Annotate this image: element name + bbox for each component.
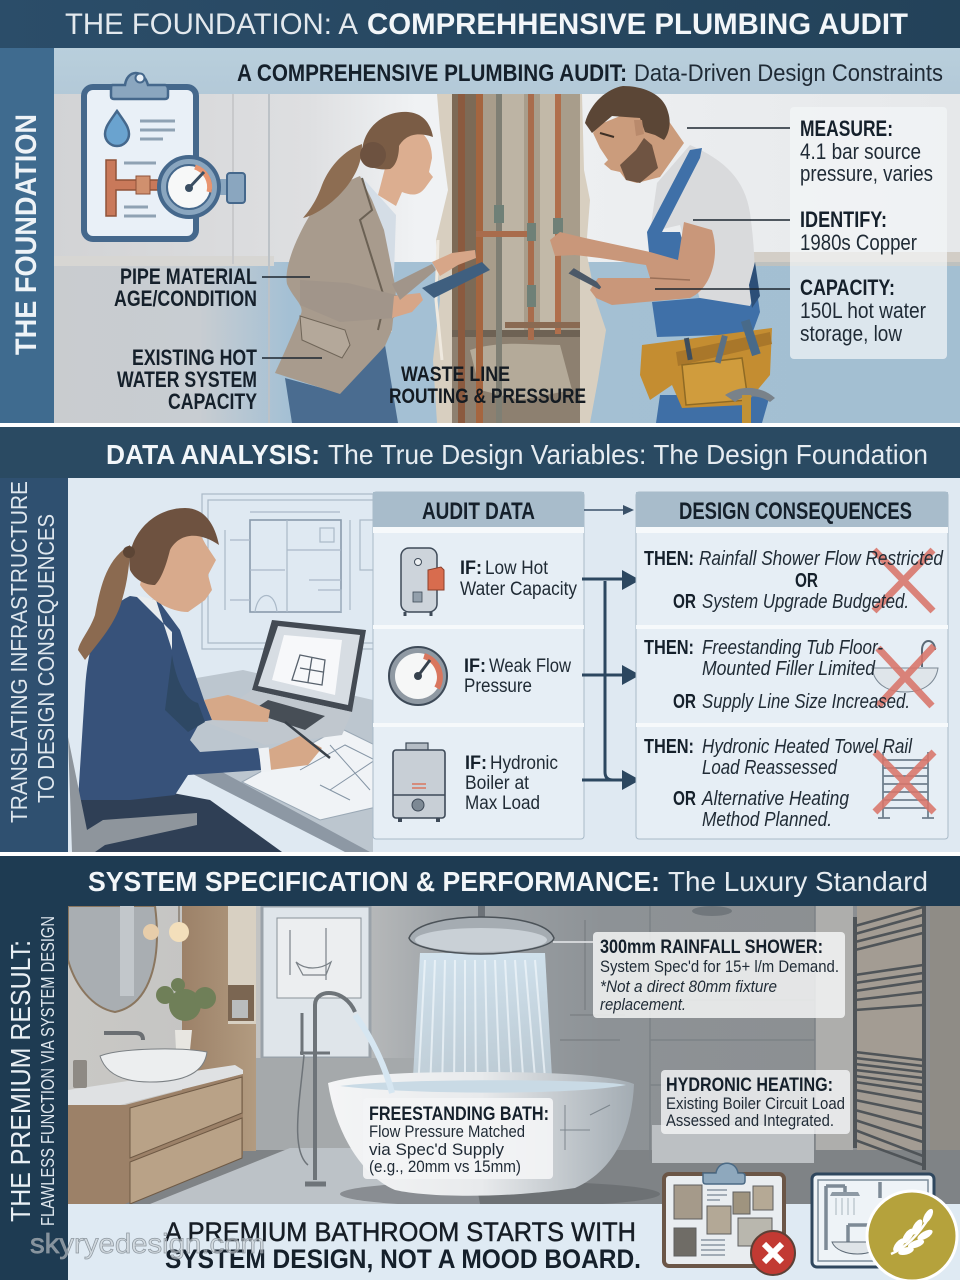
callout labels: pipe material and hot water: CAPACITY xyxy=(168,389,257,414)
callout labels: pipe material and hot water: EXISTING HOT xyxy=(132,345,257,370)
icon: system schematic xyxy=(812,1174,934,1267)
audit data table: Pressure xyxy=(464,676,532,697)
audit data table: Water Capacity xyxy=(460,579,577,600)
design consequences table: OR xyxy=(673,788,696,810)
audit data table xyxy=(373,492,584,839)
design consequences table: THEN: xyxy=(644,736,694,758)
side label: translating infrastructure xyxy=(0,478,68,852)
arrows: audit data to consequences xyxy=(582,505,640,790)
logo badge: wheat sprig xyxy=(867,1191,957,1280)
panel: the foundation xyxy=(0,48,960,423)
measurements callout box: storage, low xyxy=(800,321,902,346)
callout: hydronic heating: Assessed and Integrated. xyxy=(666,1111,834,1130)
section heading: system specification: SYSTEM SPECIFICATION & PERFORMANCE: xyxy=(88,866,660,897)
audit data table: IF: xyxy=(464,656,486,677)
design consequences table: Load Reassessed xyxy=(702,757,838,779)
audit scene illustration xyxy=(54,86,960,423)
wall tap xyxy=(104,1033,143,1040)
blueprint on wall xyxy=(202,494,382,649)
measurements callout box: MEASURE: xyxy=(800,116,893,141)
measurements callout box: pressure, varies xyxy=(800,161,933,186)
plumber xyxy=(550,86,775,423)
mirror xyxy=(68,906,157,1012)
design consequences table: Mounted Filler Limited xyxy=(702,658,876,680)
audit data table: IF: xyxy=(465,753,487,774)
window xyxy=(262,906,370,1058)
title banner xyxy=(0,0,960,48)
tub shadow xyxy=(340,1183,660,1204)
header strip xyxy=(54,48,960,94)
measurements callout box: CAPACITY: xyxy=(800,275,895,300)
wall opening with pipes xyxy=(433,94,606,423)
wood tower xyxy=(182,906,256,1151)
callout: rainfall shower: System Spec'd for 15+ l/m Demand. xyxy=(600,957,839,976)
laptop xyxy=(252,620,366,712)
side label: translating infrastructure: TO DESIGN CONSEQUENCES xyxy=(33,514,59,803)
panel: data analysis xyxy=(0,427,960,852)
side label: the foundation: THE FOUNDATION xyxy=(10,114,43,355)
callout: freestanding bath: Flow Pressure Matched xyxy=(369,1122,525,1141)
design consequences table: THEN: xyxy=(644,548,694,570)
callout: rainfall shower: 300mm RAINFALL SHOWER: xyxy=(600,937,823,958)
callout labels: pipe material and hot water xyxy=(114,264,322,414)
icon: mood board with reject mark xyxy=(664,1163,795,1275)
design consequences table: THEN: xyxy=(644,637,694,659)
icon: clipboard with pressure gauge xyxy=(84,73,245,239)
callout: freestanding bath: FREESTANDING BATH: xyxy=(369,1104,549,1125)
analyst illustration xyxy=(68,478,960,852)
design consequences table: Hydronic Heated Towel Rail xyxy=(702,736,912,758)
section heading: data analysis xyxy=(0,427,960,478)
callout label: waste line: ROUTING & PRESSURE xyxy=(389,385,586,408)
audit data table: Max Load xyxy=(465,793,540,814)
panel: premium result xyxy=(0,856,960,1280)
design consequences table: Method Planned. xyxy=(702,809,832,831)
side label: the premium result xyxy=(0,906,68,1280)
design consequences table xyxy=(636,492,948,839)
icon: weak pressure gauge xyxy=(389,647,447,705)
callout labels: pipe material and hot water: PIPE MATERIAL xyxy=(120,264,257,289)
callout: rainfall shower xyxy=(593,932,845,1018)
callout: rainfall shower: *Not a direct 80mm fixture xyxy=(600,977,777,996)
audit data table: Hydronic xyxy=(490,753,558,774)
callout: freestanding bath: via Spec'd Supply xyxy=(369,1140,504,1159)
design consequences table: Freestanding Tub Floor- xyxy=(702,637,883,659)
floor and lower wall xyxy=(68,1150,960,1204)
design consequences table: OR xyxy=(673,691,696,713)
plant xyxy=(156,978,216,1021)
audit data table: IF: xyxy=(460,558,482,579)
icon: crossed bath xyxy=(872,641,938,692)
callout labels: pipe material and hot water: WATER SYSTEM xyxy=(117,367,257,392)
header strip: A COMPREHENSIVE PLUMBING AUDIT: xyxy=(237,60,627,87)
title banner: THE FOUNDATION: A xyxy=(65,8,358,41)
title banner: COMPREHHENSIVE PLUMBING AUDIT xyxy=(367,8,908,41)
design consequences table: Alternative Heating xyxy=(701,788,849,810)
closing statement: SYSTEM DESIGN, NOT A MOOD BOARD. xyxy=(165,1244,641,1274)
closing statement xyxy=(68,1204,960,1280)
callout: hydronic heating: Existing Boiler Circuit Load xyxy=(666,1094,845,1113)
audit data table: AUDIT DATA xyxy=(422,498,535,525)
side label: the premium result: FLAWLESS FUNCTION VIA SYSTEM DESIGN xyxy=(38,916,58,1226)
design consequences table: System Upgrade Budgeted. xyxy=(702,591,909,613)
desk xyxy=(185,670,373,852)
icon: water heater xyxy=(401,548,444,616)
papers xyxy=(242,728,385,820)
shower enclosure xyxy=(560,906,815,1160)
measurements callout box: 150L hot water xyxy=(800,298,926,323)
icon: crossed towel rail xyxy=(878,752,934,818)
watermark: skyryedesign.com xyxy=(30,1228,265,1259)
design consequences table: OR xyxy=(795,570,818,592)
audit data table: Low Hot xyxy=(485,558,549,579)
woman at desk xyxy=(80,794,282,852)
section heading: data analysis: DATA ANALYSIS: xyxy=(106,439,320,470)
freestanding tub xyxy=(328,1072,634,1196)
pendant lamps xyxy=(169,922,189,942)
measurements callout box: 4.1 bar source xyxy=(800,139,921,164)
section heading: data analysis: The True Design Variables: The Design Foundation xyxy=(328,439,928,470)
side label: translating infrastructure: TRANSLATING INFRASTRUCTURE xyxy=(6,481,32,823)
floor filler tap xyxy=(298,993,392,1184)
side label: the foundation xyxy=(0,48,54,423)
measurements callout box xyxy=(655,107,947,359)
measurements callout box: 1980s Copper xyxy=(800,230,917,255)
callout: rainfall shower: replacement. xyxy=(600,995,686,1014)
callout: freestanding bath xyxy=(363,1098,553,1179)
audit data table: Weak Flow xyxy=(489,656,571,677)
callout: freestanding bath: (e.g., 20mm vs 15mm) xyxy=(369,1157,521,1176)
callout label: waste line xyxy=(389,363,586,408)
rear wall panels behind towel rail xyxy=(816,906,960,1150)
callout label: waste line: WASTE LINE xyxy=(401,363,510,386)
luxury bathroom illustration xyxy=(68,906,960,1207)
callout: hydronic heating xyxy=(661,1070,850,1134)
callout: hydronic heating: HYDRONIC HEATING: xyxy=(666,1075,833,1096)
side label: the premium result: THE PREMIUM RESULT: xyxy=(5,940,36,1222)
design consequences table: Supply Line Size Increased. xyxy=(702,691,910,713)
red crosses xyxy=(874,550,934,812)
section heading: system specification: The Luxury Standard xyxy=(668,866,928,897)
section heading: system specification xyxy=(0,856,960,906)
vanity and basin xyxy=(68,1065,243,1105)
icon: boiler xyxy=(393,743,445,822)
audit data table: Boiler at xyxy=(465,773,530,794)
measurements callout box: IDENTIFY: xyxy=(800,207,887,232)
woman inspector xyxy=(275,112,490,423)
closing statement: A PREMIUM BATHROOM STARTS WITH xyxy=(165,1217,636,1247)
design consequences table: OR xyxy=(673,591,696,613)
rainfall shower xyxy=(408,906,593,1074)
towel rail xyxy=(855,906,924,1170)
callout labels: pipe material and hot water: AGE/CONDITION xyxy=(114,286,257,311)
